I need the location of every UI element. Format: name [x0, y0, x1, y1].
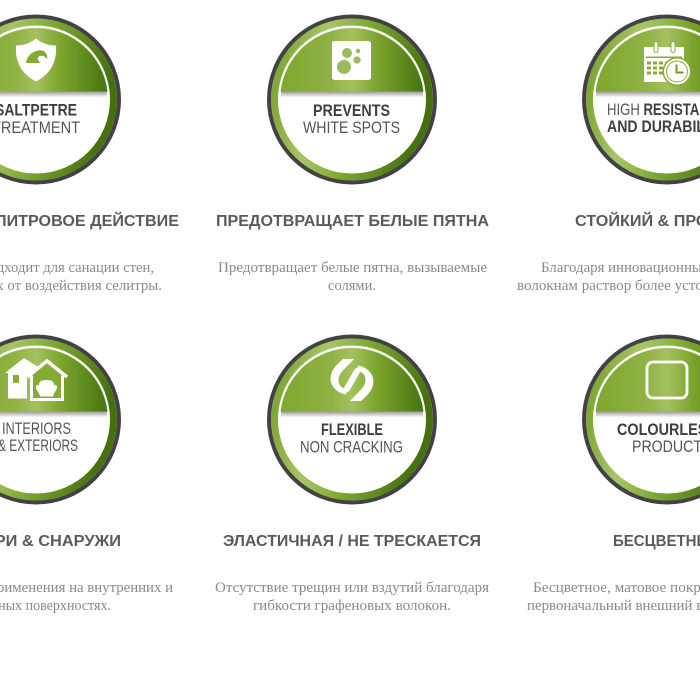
text: column 1 row 1	[0, 260, 162, 294]
badge label: INTERIORS	[2, 420, 71, 438]
badge label	[0, 420, 78, 455]
badge label: WHITE SPOTS	[303, 119, 400, 137]
icon: calendar and clock	[644, 42, 692, 86]
badge label: PREVENTS	[313, 102, 390, 120]
badge label: NON CRACKING	[300, 438, 403, 456]
icon: two houses with armchair	[5, 358, 67, 400]
text: column 2 row 2: Отсутствие трещин или вздутий благодаря	[215, 580, 489, 596]
icon: flexible symbol	[331, 359, 373, 401]
text: column 3 row 2	[527, 580, 700, 614]
text: column 3 row 1	[517, 260, 700, 294]
badge: high resistance and durability	[584, 16, 700, 182]
icon: rounded square outline	[647, 362, 687, 398]
icon: shield with wave	[16, 38, 56, 82]
badge: flexible non cracking	[269, 336, 435, 502]
badge label	[0, 102, 80, 137]
text: column 2 row 1: солями.	[328, 278, 376, 294]
text: column 1 row 2	[0, 580, 173, 614]
icon: square with spots	[332, 41, 371, 80]
badge label: & EXTERIORS	[0, 437, 78, 455]
heading: column 2 row 2: ЭЛАСТИЧНАЯ / НЕ ТРЕСКАЕТСЯ	[223, 533, 481, 550]
text: column 2 row 1	[218, 260, 487, 294]
badge label	[607, 101, 700, 136]
badge label	[303, 102, 400, 137]
badge: colourless product	[584, 336, 700, 502]
text: column 2 row 1: Предотвращает белые пятна, вызываемые	[218, 260, 487, 276]
badge: saltpetre treatment	[0, 16, 119, 182]
badge label	[617, 421, 700, 456]
text: column 2 row 2	[215, 580, 489, 614]
badge: prevents white spots	[269, 16, 435, 182]
badge label	[300, 421, 403, 456]
text: column 2 row 2: гибкости графеновых волокон.	[253, 598, 451, 614]
heading: column 2 row 1: ПРЕДОТВРАЩАЕТ БЕЛЫЕ ПЯТНА	[216, 213, 489, 230]
badge label: FLEXIBLE	[321, 421, 383, 439]
badge: interiors and exteriors	[0, 336, 119, 502]
